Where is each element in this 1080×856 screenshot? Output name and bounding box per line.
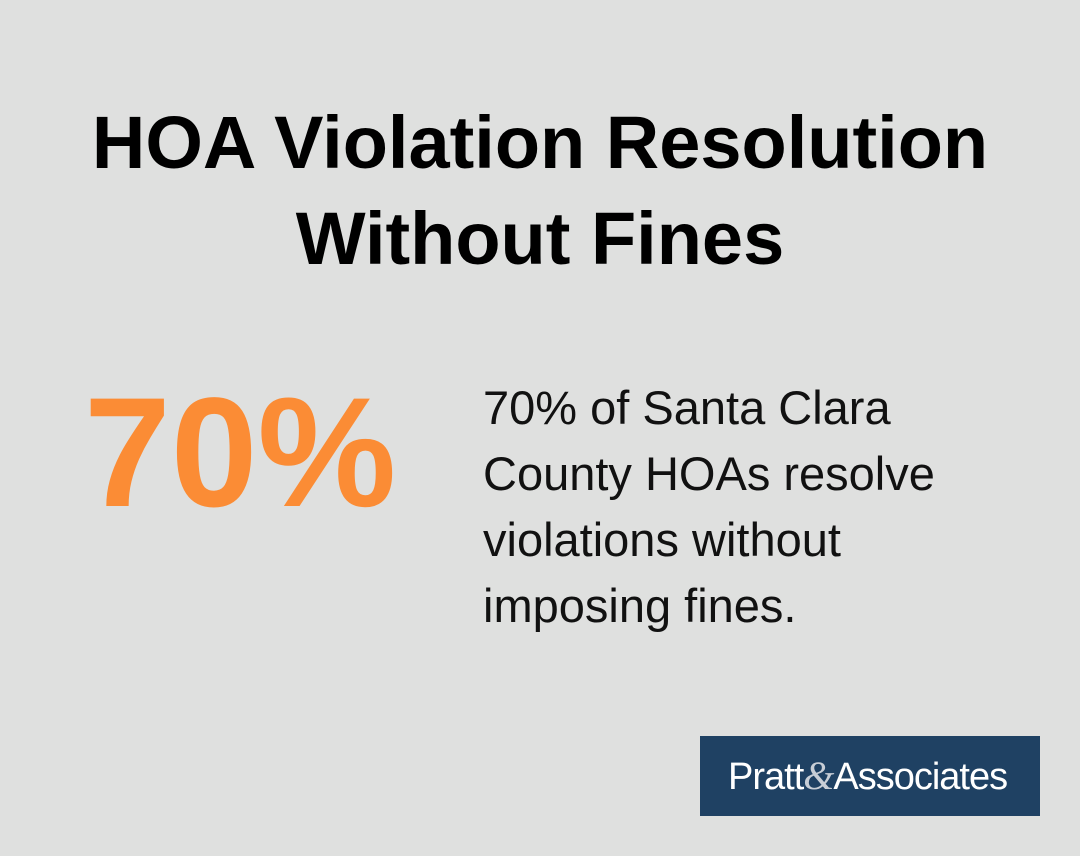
stat description: County HOAs resolve xyxy=(483,447,935,500)
stat description: 70% of Santa Clara xyxy=(483,381,891,434)
logo: Pratt & Associates: Pratt&Associates xyxy=(728,753,1007,798)
logo: Pratt & Associates xyxy=(700,736,1040,816)
title: Without Fines xyxy=(296,197,784,280)
stat description xyxy=(483,381,935,632)
title xyxy=(92,101,988,280)
title: HOA Violation Resolution xyxy=(92,101,988,184)
stat description: imposing fines. xyxy=(483,579,796,632)
stat description: violations without xyxy=(483,513,841,566)
big stat: 70%: 70% xyxy=(84,366,396,540)
